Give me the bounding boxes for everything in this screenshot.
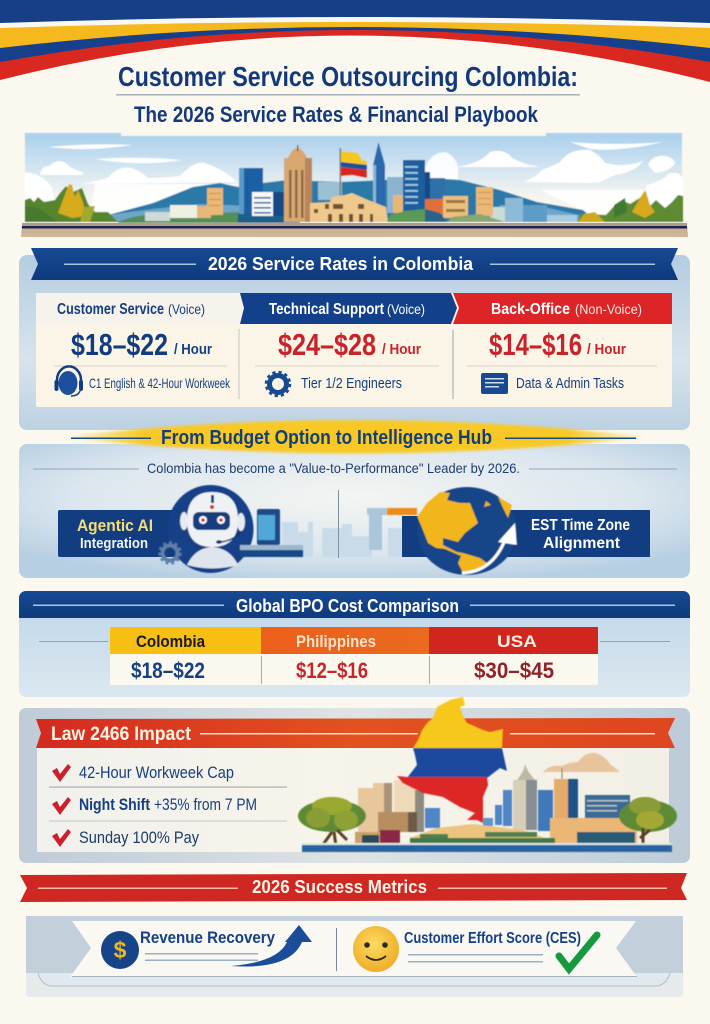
section banner: success metrics xyxy=(20,873,687,902)
section header: BPO xyxy=(19,591,690,618)
ribbon heading xyxy=(60,420,650,454)
section banner: service rates: 2026 Service Rates in Colombia xyxy=(208,254,474,274)
checklist xyxy=(49,763,287,847)
section banner: service rates xyxy=(31,248,678,280)
scene illustration xyxy=(298,753,677,852)
column: customer service xyxy=(36,293,243,396)
column: back-office: / Hour xyxy=(587,341,626,358)
column: technical support: / Hour xyxy=(382,341,421,358)
central hall xyxy=(310,193,388,222)
icon: gear xyxy=(266,372,290,396)
column: technical support: Technical Support xyxy=(269,301,384,318)
right shrubs xyxy=(387,209,447,222)
item: night shift xyxy=(52,795,257,815)
label: agentic AI xyxy=(58,510,188,557)
column: USA xyxy=(429,627,598,683)
section header: BPO: Global BPO Cost Comparison xyxy=(236,596,459,616)
metric: customer effort score: Customer Effort Score (CES) xyxy=(404,930,581,947)
column: USA: USA xyxy=(497,632,537,651)
icon: dollar coin: $ xyxy=(114,937,127,963)
map of Colombia in flag colours xyxy=(397,697,507,823)
icon: document xyxy=(481,373,508,394)
ribbon heading: From Budget Option to Intelligence Hub xyxy=(161,427,492,449)
section banner: success metrics: 2026 Success Metrics xyxy=(252,877,427,897)
icon: up arrow xyxy=(231,925,312,966)
buildings xyxy=(207,188,223,215)
label: agentic AI: Integration xyxy=(80,535,148,552)
header flag swoosh xyxy=(0,0,710,120)
column: Philippines: $12–$16 xyxy=(296,658,368,683)
label: EST time zone xyxy=(402,510,650,557)
title xyxy=(116,61,580,127)
faint skyline xyxy=(282,508,402,557)
icon: globe with arrow xyxy=(387,487,517,575)
icon: AI robot with laptop xyxy=(160,485,303,573)
column: technical support: $24–$28 xyxy=(278,327,376,362)
intro sentence: Colombia has become a "Value-to-Performance" Leader by 2026. xyxy=(147,460,520,476)
column: customer service: C1 English & 42-Hour Workweek xyxy=(89,375,231,391)
red banner: Law 2466: Law 2466 Impact xyxy=(51,724,192,745)
metric: customer effort score xyxy=(353,926,597,972)
skyline banner illustration xyxy=(25,133,683,224)
ground shelf xyxy=(21,223,688,237)
clouds xyxy=(25,142,683,215)
column: customer service: (Voice) xyxy=(168,301,205,317)
column: customer service: / Hour xyxy=(174,341,212,358)
item: night shift: +35% from 7 PM xyxy=(154,795,257,814)
column: technical support: (Voice) xyxy=(387,301,425,317)
column: back-office: Data & Admin Tasks xyxy=(516,376,624,392)
column: Philippines xyxy=(261,627,429,683)
panel: success metrics xyxy=(26,916,683,997)
metric: revenue recovery xyxy=(101,925,312,969)
column: Colombia xyxy=(110,627,261,683)
checklist card xyxy=(37,748,669,852)
column: Colombia: Colombia xyxy=(136,632,205,651)
column: Colombia: $18–$22 xyxy=(131,658,205,683)
column: technical support xyxy=(240,293,457,396)
label: EST time zone: EST Time Zone xyxy=(531,517,630,534)
item: workweek cap: 42-Hour Workweek Cap xyxy=(79,763,234,782)
icon: headset xyxy=(54,366,83,396)
panel: Law 2466 impact xyxy=(19,697,690,863)
panel: intelligence hub xyxy=(19,420,690,578)
column: back-office: (Non-Voice) xyxy=(575,301,642,317)
column: Philippines: Philippines xyxy=(296,632,376,651)
column: USA: $30–$45 xyxy=(474,658,554,683)
title: Customer Service Outsourcing Colombia: xyxy=(118,61,578,92)
column: technical support: Tier 1/2 Engineers xyxy=(301,376,402,392)
column: customer service: Customer Service xyxy=(57,301,164,318)
item: night shift: Night Shift xyxy=(79,795,150,814)
flag xyxy=(340,148,341,200)
right trees xyxy=(578,192,683,222)
white ribbon xyxy=(70,921,637,977)
left trees xyxy=(25,186,118,222)
panel: 2026 service rates xyxy=(19,248,690,430)
mountains xyxy=(108,178,592,222)
comparison table xyxy=(110,627,598,685)
label: EST time zone: Alignment xyxy=(543,535,621,552)
item: Sunday pay: Sunday 100% Pay xyxy=(79,828,199,847)
icon: dollar coin xyxy=(101,931,139,969)
title: The 2026 Service Rates & Financial Playbook xyxy=(134,102,539,127)
column: back-office xyxy=(453,293,672,394)
rate cards xyxy=(36,293,672,407)
icon: green check xyxy=(559,935,597,969)
column: back-office: $14–$16 xyxy=(489,327,582,362)
panel: global BPO cost comparison xyxy=(19,591,690,697)
red banner: Law 2466 xyxy=(36,718,675,748)
icon: smiley xyxy=(353,926,399,972)
column: back-office: Back-Office xyxy=(491,301,570,318)
foreground shrubs xyxy=(118,212,300,223)
column: customer service: $18–$22 xyxy=(71,327,168,362)
metric: revenue recovery: Revenue Recovery xyxy=(140,928,275,947)
label: agentic AI: Agentic AI xyxy=(77,516,153,535)
trees xyxy=(298,800,366,832)
